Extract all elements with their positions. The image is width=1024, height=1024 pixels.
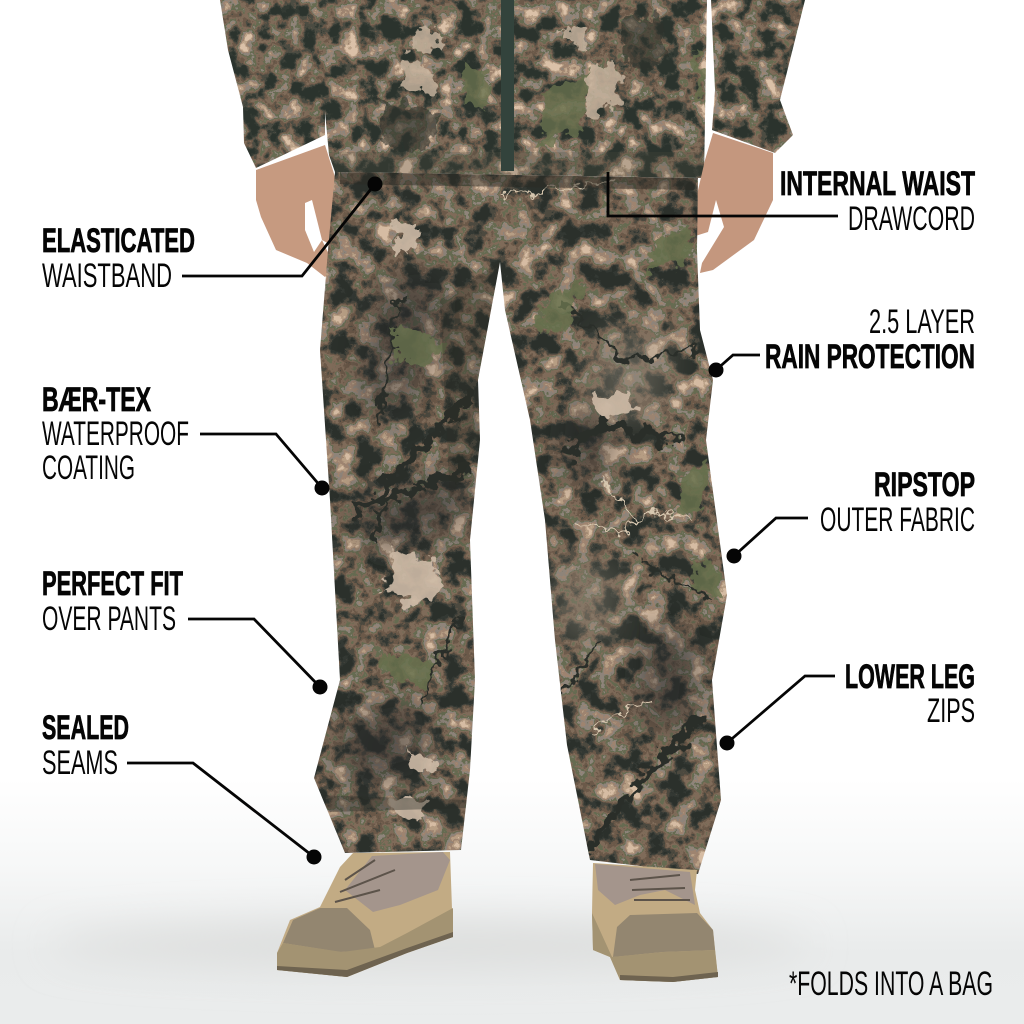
- jacket zip: [501, 0, 514, 171]
- callout: elasticated waistband: [42, 176, 382, 295]
- large tonal shading: [340, 270, 700, 790]
- left hand finger gap: [305, 200, 322, 252]
- callout: baer-tex waterproof coating: BÆR-TEX: [42, 381, 151, 419]
- hands: [256, 133, 773, 277]
- ground shadow: [50, 923, 810, 967]
- pale twigs: [500, 180, 690, 730]
- callout: sealed seams: SEALED: [42, 709, 129, 747]
- boot laces: [335, 860, 395, 902]
- boot toe cap: [283, 908, 375, 952]
- right hand: [690, 133, 773, 273]
- boot sole shade: [277, 932, 453, 977]
- boot toe cap: [613, 913, 715, 957]
- ragged camo overlays: [355, 180, 725, 850]
- leg shading: [340, 172, 698, 190]
- callout: ripstop outer fabric: RIPSTOP: [874, 466, 975, 504]
- green foliage patches: [380, 225, 725, 685]
- left hand: [256, 145, 340, 277]
- boot laces: [630, 875, 690, 900]
- callout: baer-tex waterproof coating: [42, 381, 330, 496]
- callout: lower leg zips: [720, 658, 975, 750]
- pants camouflage fabric: [305, 165, 735, 885]
- callout: elasticated waistband: WAISTBAND: [42, 257, 172, 295]
- callout: ripstop outer fabric: [726, 466, 975, 564]
- jacket hem: [325, 152, 705, 178]
- pale patches: [385, 220, 635, 820]
- callout: perfect fit over pants: OVER PANTS: [42, 600, 176, 638]
- callout: internal waist drawcord: [608, 165, 975, 238]
- boot sole shade: [620, 972, 718, 982]
- callout: perfect fit over pants: [42, 565, 328, 694]
- callout: baer-tex waterproof coating: WATERPROOF: [42, 415, 189, 453]
- callout: sealed seams: [42, 709, 322, 864]
- boot sole: [277, 908, 453, 977]
- callout: 2.5 layer rain protection: [708, 303, 975, 378]
- dark branches: [355, 395, 700, 850]
- right boot: [592, 863, 718, 982]
- boot canvas panel: [345, 852, 450, 912]
- jacket: [215, 0, 810, 185]
- boot canvas panel: [595, 864, 695, 905]
- callout: lower leg zips: ZIPS: [927, 692, 975, 730]
- jacket overlays: [380, 10, 705, 150]
- boot sole: [592, 913, 718, 982]
- callout: sealed seams: SEAMS: [42, 744, 118, 782]
- callout: baer-tex waterproof coating: COATING: [42, 449, 135, 487]
- left boot: [277, 852, 453, 977]
- jacket camouflage fabric: [215, 0, 810, 185]
- camouflage pants: [305, 165, 735, 885]
- callout: elasticated waistband: ELASTICATED: [42, 222, 195, 260]
- callout: perfect fit over pants: PERFECT FIT: [42, 565, 183, 603]
